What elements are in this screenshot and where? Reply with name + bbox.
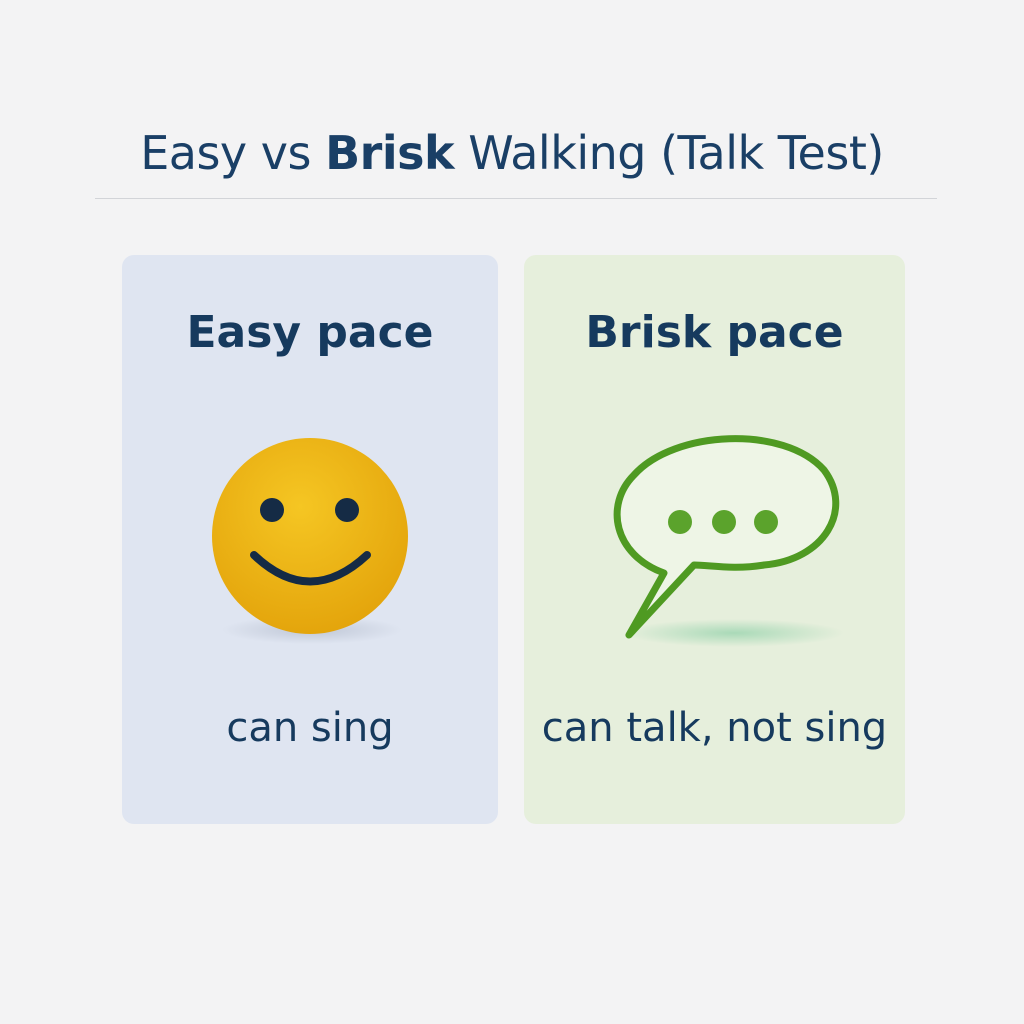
text: can talk, not sing: can talk, not sing xyxy=(542,705,887,751)
text: can sing: can sing xyxy=(226,705,394,751)
title: Easy vs Brisk Walking (Talk Test) xyxy=(140,126,884,180)
panel: easy pace xyxy=(122,255,498,824)
panel: brisk pace xyxy=(524,255,905,824)
heading: easy pace: Easy pace xyxy=(186,307,434,358)
icon: speech bubble xyxy=(614,435,840,645)
icon: smiley face xyxy=(212,438,408,640)
heading: brisk pace: Brisk pace xyxy=(585,307,844,358)
